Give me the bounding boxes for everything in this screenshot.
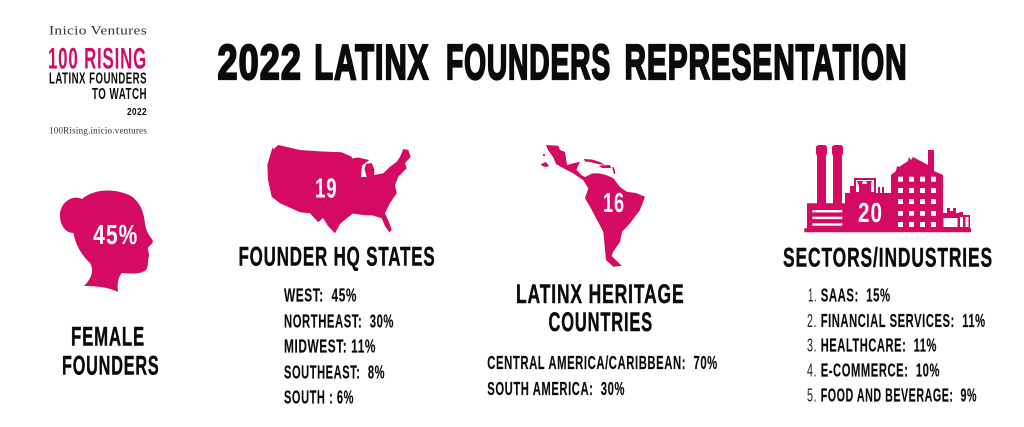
- heading: latinx heritage countries: [516, 279, 684, 337]
- list: top sectors: SAAS: 15%: [821, 286, 891, 306]
- list: heritage regions: [487, 353, 718, 399]
- list: top sectors: HEALTHCARE: 11%: [821, 336, 937, 356]
- list: top sectors: 2.: [807, 311, 817, 331]
- icon: factory: [804, 145, 971, 232]
- factory windows and vents: [812, 177, 968, 227]
- factory pipework funnels: [857, 181, 872, 193]
- heading: latinx heritage countries: COUNTRIES: [548, 307, 653, 337]
- icon: united states map: [267, 145, 411, 233]
- heading: female founders: [62, 322, 160, 380]
- heading: founder hq states: FOUNDER HQ STATES: [238, 242, 436, 272]
- logo: organisation name: Inicio Ventures: [49, 23, 147, 38]
- list: top sectors: 4.: [807, 360, 817, 380]
- list: regions: SOUTH : 6%: [284, 387, 354, 407]
- logo: website: 100Rising.inicio.ventures: [49, 126, 147, 136]
- list: top sectors: E-COMMERCE: 10%: [821, 360, 940, 380]
- list: regions: WEST: 45%: [284, 286, 357, 306]
- title: LATINX: [314, 35, 429, 90]
- list: top sectors: [807, 286, 986, 406]
- heading: female founders: FOUNDERS: [62, 350, 160, 380]
- title: 2022: [218, 35, 302, 90]
- title: [218, 35, 908, 90]
- logo: to watch: TO WATCH: [92, 86, 147, 103]
- title: FOUNDERS: [446, 35, 611, 90]
- list: top sectors: 5.: [807, 386, 817, 406]
- stat: 16 countries: 16: [603, 187, 625, 218]
- logo: year: 2022: [127, 106, 147, 118]
- list: regions: SOUTHEAST: 8%: [284, 362, 385, 382]
- logo block: [48, 23, 147, 137]
- list: heritage regions: CENTRAL AMERICA/CARIBBEAN: 70%: [487, 353, 718, 373]
- logo: latinx founders: LATINX FOUNDERS: [49, 70, 147, 87]
- list: regions: NORTHEAST: 30%: [284, 311, 394, 331]
- icon: woman head silhouette: [60, 190, 153, 292]
- stat: 20 sectors: 20: [858, 197, 883, 228]
- list: top sectors: 3.: [807, 336, 817, 356]
- stat: 19 states: 19: [315, 172, 338, 204]
- list: regions: [284, 286, 394, 407]
- panel: female founders: [60, 190, 160, 380]
- list: top sectors: 1.: [808, 286, 817, 306]
- icon: latin america map: [541, 145, 645, 267]
- list: heritage regions: SOUTH AMERICA: 30%: [487, 379, 625, 399]
- stat: 45%: 45%: [93, 219, 138, 250]
- panel: latinx heritage countries: [487, 145, 718, 399]
- panel: founder hq states: [238, 145, 436, 407]
- list: regions: MIDWEST: 11%: [284, 337, 376, 357]
- logo: 100 rising: 100 RISING: [48, 42, 147, 75]
- heading: female founders: FEMALE: [71, 322, 145, 352]
- heading: latinx heritage countries: LATINX HERITAGE: [516, 279, 684, 309]
- panel: sectors and industries: [783, 145, 993, 406]
